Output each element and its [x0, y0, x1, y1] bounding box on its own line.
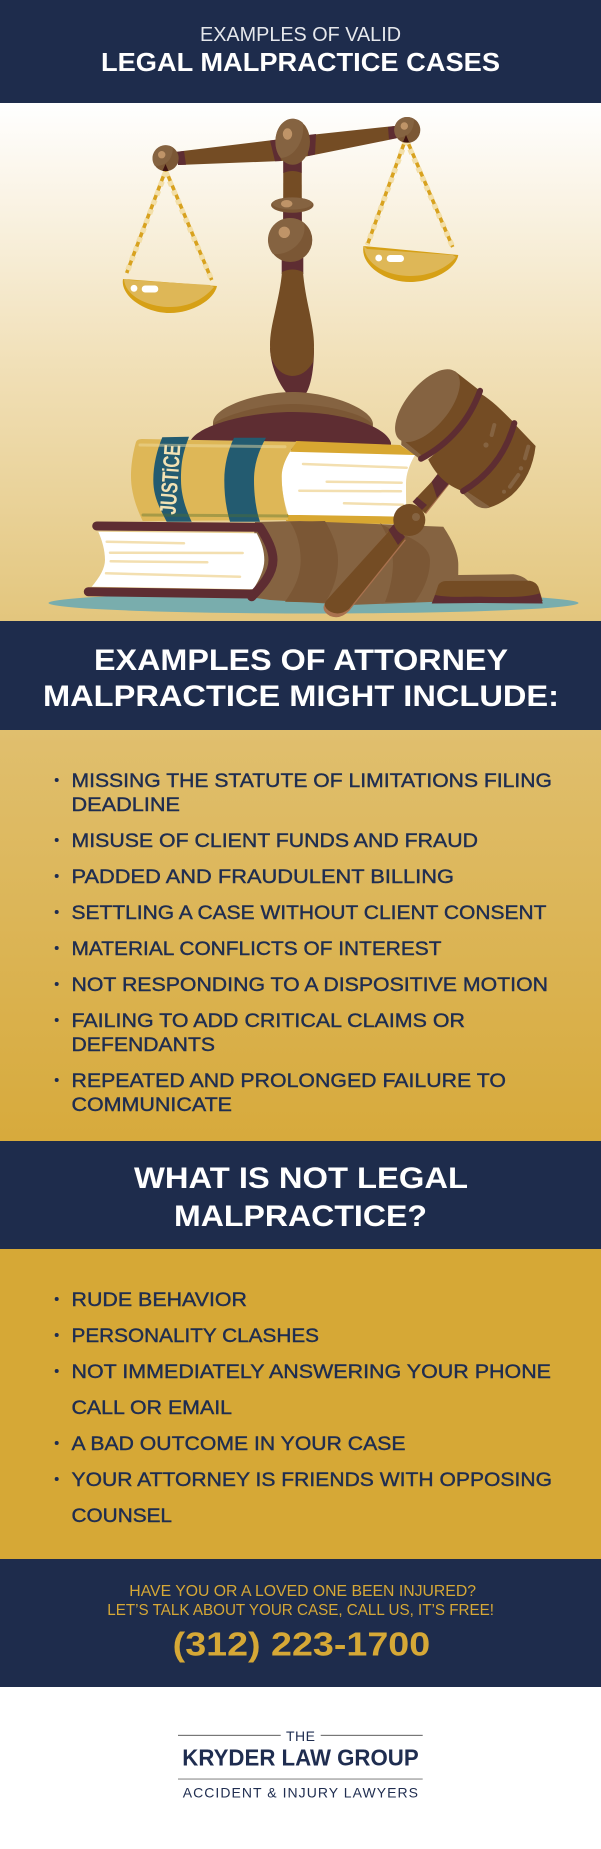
gavel band near: [421, 390, 486, 465]
near section: [399, 370, 487, 465]
book top cover band: [290, 441, 416, 456]
list item: [55, 770, 552, 816]
list item: COMMUNICATE: [72, 1094, 232, 1116]
list item: NOT IMMEDIATELY ANSWERING YOUR PHONE: [72, 1361, 551, 1383]
icon: sound block: [432, 574, 543, 604]
illustration: scale base dome: [190, 392, 391, 450]
panel: malpractice examples list: [0, 730, 601, 1141]
list item: REPEATED AND PROLONGED FAILURE TO: [72, 1070, 506, 1092]
gavel band far: [460, 423, 522, 495]
gavel face: [383, 358, 472, 453]
icon: scales of justice: [123, 117, 458, 395]
right beam ball: [394, 117, 420, 143]
beam: [177, 126, 397, 165]
left chain: [127, 170, 212, 280]
book bottom cover band: [286, 514, 407, 524]
gavel handle: [324, 473, 451, 617]
panel: examples heading: [0, 621, 601, 730]
logo: kryder law group: ACCIDENT & INJURY LAWYERS: [183, 1784, 418, 1800]
illustration: lower book: [88, 521, 458, 605]
list item: PADDED AND FRAUDULENT BILLING: [72, 866, 454, 888]
list item: [55, 1010, 465, 1056]
list item: [55, 1361, 551, 1419]
beam bands: [176, 126, 397, 165]
list item: [55, 1070, 506, 1116]
page lines: [299, 464, 407, 505]
book band: justice: [153, 437, 192, 522]
logo: kryder law group: [178, 1728, 423, 1800]
book band: plain: [224, 438, 266, 522]
panel: top header: [0, 0, 601, 103]
near section lip: [398, 439, 423, 460]
book spine: [131, 439, 297, 521]
column dark bands: [283, 160, 302, 222]
column: [283, 160, 302, 270]
callout line 1: HAVE YOU OR A LOVED ONE BEEN INJURED?: [129, 1583, 476, 1600]
phone number: (312) 223-1700: [173, 1626, 430, 1662]
list item: DEFENDANTS: [72, 1034, 215, 1056]
list item: RUDE BEHAVIOR: [72, 1289, 247, 1311]
illustration: teal ground shadow: [48, 592, 578, 614]
right chain: [367, 138, 453, 247]
stem dark band: [282, 258, 303, 274]
book cover: [88, 526, 273, 597]
list item: YOUR ATTORNEY IS FRIENDS WITH OPPOSING: [72, 1469, 552, 1491]
heading line 2: MALPRACTICE MIGHT INCLUDE:: [43, 680, 559, 713]
list item: NOT RESPONDING TO A DISPOSITIVE MOTION: [72, 974, 548, 996]
panel: not malpractice heading: [0, 1141, 601, 1249]
list item: [55, 1469, 552, 1527]
list item: MISSING THE STATUTE OF LIMITATIONS FILING: [72, 770, 552, 792]
right pan: [363, 246, 458, 282]
panel: hero illustration: [0, 103, 601, 621]
list item: MATERIAL CONFLICTS OF INTEREST: [72, 938, 442, 960]
callout line 2: LET’S TALK ABOUT YOUR CASE, CALL US, IT’S FREE!: [107, 1602, 494, 1619]
list item: FAILING TO ADD CRITICAL CLAIMS OR: [72, 1010, 465, 1032]
icon: gavel: [324, 358, 551, 617]
list item: MISUSE OF CLIENT FUNDS AND FRAUD: [72, 830, 478, 852]
left beam ball: [152, 145, 179, 171]
list item: CALL OR EMAIL: [72, 1397, 232, 1419]
book pages: [282, 452, 415, 517]
book title: JUSTiCE: [155, 444, 185, 515]
center beam knob: [275, 119, 310, 165]
list item: COUNSEL: [72, 1505, 172, 1527]
column ball: [268, 218, 312, 262]
logo: kryder law group: THE: [286, 1728, 315, 1744]
list item: SETTLING A CASE WITHOUT CLIENT CONSENT: [72, 902, 547, 924]
far section lip: [462, 488, 489, 513]
gavel highlights: [483, 425, 528, 494]
heading: examples of valid: EXAMPLES OF VALID: [200, 23, 401, 46]
page lines: [106, 542, 243, 577]
panel: not malpractice list: [0, 1249, 601, 1559]
list item: PERSONALITY CLASHES: [72, 1325, 319, 1347]
logo: kryder law group: KRYDER LAW GROUP: [182, 1745, 419, 1771]
heading line 1: EXAMPLES OF ATTORNEY: [94, 644, 508, 677]
heading: legal malpractice cases: LEGAL MALPRACTICE CASES: [101, 47, 500, 77]
left pan: [123, 279, 217, 313]
book spine highlights: [140, 445, 285, 447]
column disc: [271, 197, 314, 213]
panel: call to action: [0, 1559, 601, 1687]
far section: [458, 421, 549, 517]
list item: DEADLINE: [72, 794, 180, 816]
list item: A BAD OUTCOME IN YOUR CASE: [72, 1433, 406, 1455]
heading line 2: MALPRACTICE?: [174, 1200, 427, 1233]
illustration: upper book: [131, 437, 416, 524]
book spine lower stripe: [143, 515, 287, 516]
heading line 1: WHAT IS NOT LEGAL: [134, 1162, 468, 1195]
gavel head: [381, 358, 551, 520]
middle section: [418, 389, 525, 499]
baluster stem: [270, 270, 314, 395]
gavel collar ball: [393, 504, 425, 536]
